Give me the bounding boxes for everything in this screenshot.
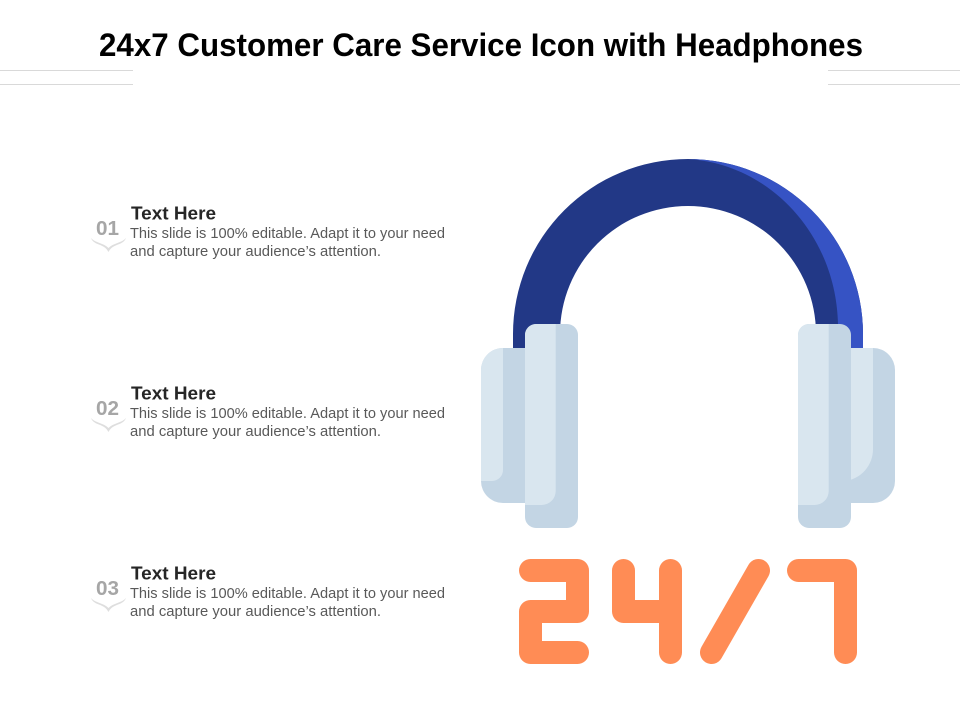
number badge 01: 01: [96, 218, 119, 240]
headband: [513, 159, 863, 350]
title: 24x7 Customer Care Service Icon with Headphones: [99, 27, 863, 63]
number badge 02: 02: [96, 398, 119, 420]
list item 03: [91, 564, 445, 620]
description 03: This slide is 100% editable. Adapt it to your need: [130, 585, 445, 602]
description 03: and capture your audience’s attention.: [130, 603, 381, 620]
heading 02: Text Here: [131, 384, 216, 404]
number badge 03: 03: [96, 578, 119, 600]
description 01: This slide is 100% editable. Adapt it to your need: [130, 225, 445, 242]
left ear cup: [481, 324, 578, 528]
icon: headphones: [481, 159, 895, 528]
number badge 02: [91, 398, 126, 432]
right ear cup: [798, 324, 895, 528]
description 02: This slide is 100% editable. Adapt it to your need: [130, 405, 445, 422]
list item 02: [91, 384, 445, 440]
number badge 03: [91, 578, 126, 612]
list item 01: [91, 204, 445, 260]
heading 03: Text Here: [131, 564, 216, 584]
description 02: and capture your audience’s attention.: [130, 423, 381, 440]
icon: 24/7 digits: [530, 570, 846, 652]
heading 01: Text Here: [131, 204, 216, 224]
description 01: and capture your audience’s attention.: [130, 243, 381, 260]
number badge 01: [91, 218, 126, 252]
